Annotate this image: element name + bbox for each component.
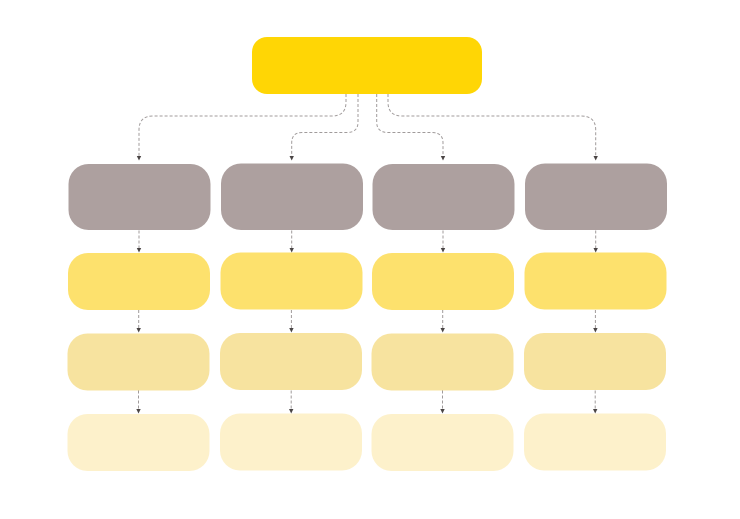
pale yellow row [68, 333, 666, 390]
yellow row [68, 252, 666, 310]
arrowheads into grey row [137, 156, 598, 160]
vertical connectors [138, 230, 596, 410]
connectors from top box [139, 94, 596, 156]
vertical arrowheads [136, 248, 598, 414]
cream row [68, 414, 666, 471]
top box [252, 37, 482, 94]
grey row [68, 164, 667, 230]
